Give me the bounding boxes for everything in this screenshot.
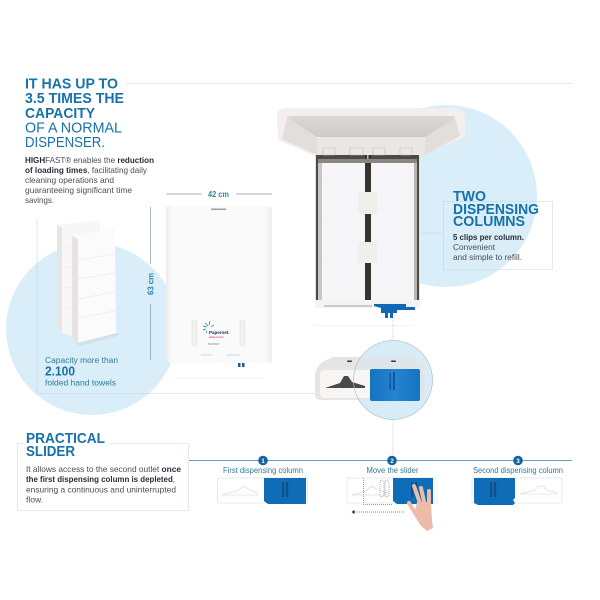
arrow: slide left (355, 511, 405, 513)
practical slider box: It allows access to the second outlet once (26, 464, 181, 474)
icon: hand (409, 486, 433, 531)
title: DISPENSER. (25, 134, 105, 151)
dimension: height 63 cm: 63 cm (146, 273, 156, 295)
background circle: two columns (355, 105, 537, 287)
title: 3.5 TIMES THE (25, 90, 124, 107)
logo: Papernet: Papernet. (209, 330, 230, 335)
open dispenser (277, 108, 465, 326)
bottom rail (315, 300, 420, 308)
callout box: two dispensing columns (444, 188, 552, 270)
capacity label (45, 355, 118, 388)
practical slider box (18, 430, 188, 510)
icon: dispenser outlets (238, 363, 244, 367)
timeline line (189, 460, 572, 462)
step 1: First dispensing column (223, 466, 303, 475)
logo: Papernet (203, 321, 230, 346)
intro text block (25, 155, 154, 205)
clips row (323, 148, 412, 155)
intro text block: cleaning operations and (25, 175, 114, 185)
dispenser front view (166, 206, 272, 379)
capacity label: Capacity more than (45, 355, 118, 365)
clips (358, 192, 377, 214)
practical slider box: the first dispensing column is depleted, (26, 474, 175, 484)
slider outlet (374, 304, 415, 318)
towel columns (322, 163, 365, 300)
body (315, 155, 420, 308)
capacity label: 2.100 (45, 364, 75, 378)
icon: towel stacks (57, 220, 120, 346)
magnifier circle (354, 340, 432, 420)
callout box: two dispensing columns: and simple to refill. (453, 252, 522, 262)
title: IT HAS UP TO (25, 76, 118, 92)
step 3: Second dispensing column (473, 466, 563, 475)
dimension: width 42 cm (166, 190, 272, 199)
lid (277, 108, 465, 156)
step 1 (218, 456, 308, 504)
practical slider box: PRACTICAL (26, 430, 105, 447)
intro text block: of loading times, facilitating daily (25, 165, 148, 175)
intro text block: savings. (25, 195, 54, 205)
intro text block: HIGHFAST® enables the reduction (25, 155, 154, 165)
callout box: two dispensing columns: COLUMNS (453, 213, 525, 230)
dimension: width 42 cm: 42 cm (208, 190, 229, 199)
callout box: two dispensing columns: 5 clips per column. (453, 233, 524, 242)
intro text block: guaranteeing significant time (25, 185, 132, 195)
step 3 (472, 456, 563, 505)
step 3: 3 (516, 459, 520, 465)
callout box: two dispensing columns: TWO (453, 188, 486, 205)
step 2 (347, 456, 437, 531)
step 2: 2 (390, 459, 394, 465)
capacity label: folded hand towels (45, 378, 116, 388)
logo: Papernet: defend tech (209, 335, 224, 339)
slider close-up (315, 340, 432, 420)
step 1: 1 (261, 459, 265, 465)
logo: Papernet: HIGHFAST (208, 343, 220, 346)
callout box: two dispensing columns: DISPENSING (453, 201, 539, 218)
dotted guide lines (37, 84, 572, 456)
callout box: two dispensing columns: Convenient (453, 242, 496, 252)
title: CAPACITY (25, 105, 95, 122)
title: OF A NORMAL (25, 120, 122, 136)
background circle: capacity (6, 243, 178, 415)
practical slider box: flow. (26, 494, 43, 504)
practical slider box: ensuring a continuous and uninterrupted (26, 484, 176, 494)
title (25, 76, 124, 151)
practical slider box: SLIDER (26, 443, 75, 460)
step 2: Move the slider (366, 466, 419, 475)
